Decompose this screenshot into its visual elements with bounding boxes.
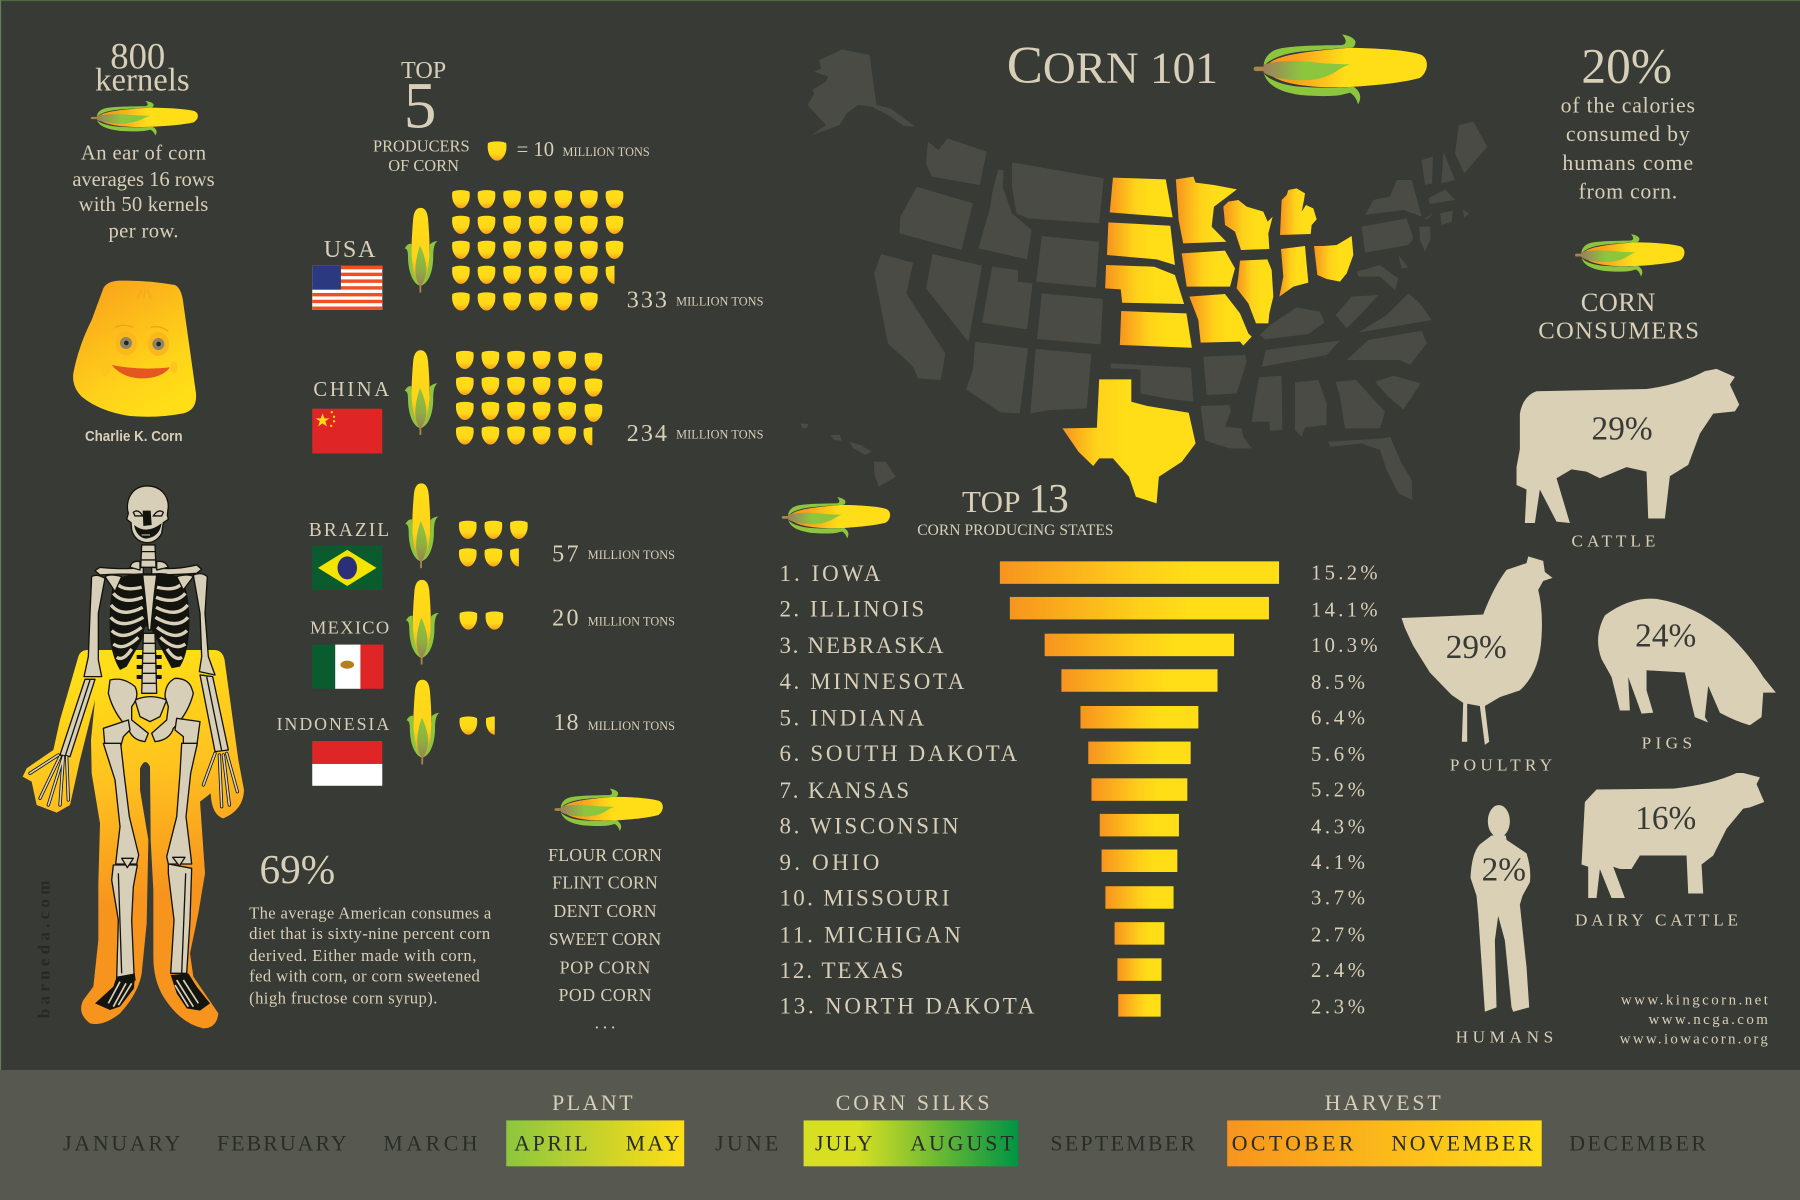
- months: APRIL: [514, 1131, 588, 1155]
- gray eastern states: [1201, 180, 1469, 500]
- icon: upright corn: [405, 350, 438, 435]
- percentages: 4.3%: [1311, 816, 1365, 838]
- calendar highlight: corn silks: [804, 1120, 1018, 1166]
- flag: China: [312, 409, 382, 453]
- row: Mexico: 20: [552, 606, 579, 632]
- heading: corn consumers: CONSUMERS: [1538, 318, 1699, 345]
- text block: corn types list: FLINT CORN: [552, 873, 658, 893]
- icon: upright corn: [405, 208, 438, 293]
- text block: American diet: (high fructose corn syrup).: [249, 988, 437, 1007]
- calendar stage labels: PLANT: [552, 1091, 633, 1115]
- callout: 20 percent of calories: 20%: [1581, 39, 1672, 94]
- percent labels: [1446, 411, 1696, 888]
- text block: corn types list: POP CORN: [560, 957, 650, 977]
- bars: [1000, 561, 1279, 1017]
- Texas highlighted: [1062, 379, 1196, 503]
- row: Brazil: MILLION TONS: [588, 548, 675, 562]
- text block: calories: humans come: [1562, 151, 1693, 175]
- row: USA: USA: [324, 237, 376, 263]
- text block: American diet: The average American consumes a: [249, 903, 492, 922]
- upper skeleton: [60, 486, 228, 757]
- heading: 800: 800: [110, 35, 165, 76]
- text block: calories: [1561, 94, 1695, 204]
- text block: kernels description: An ear of corn: [81, 143, 207, 165]
- percentages: 5.2%: [1311, 780, 1365, 802]
- row: USA: 333: [627, 288, 667, 314]
- row: Mexico: MEXICO: [310, 618, 389, 638]
- months: NOVEMBER: [1391, 1131, 1533, 1155]
- state names: 11. MICHIGAN: [779, 922, 961, 947]
- eastern corn belt states highlighted: [1182, 188, 1353, 346]
- state names: 4. MINNESOTA: [779, 669, 965, 694]
- months: MAY: [626, 1131, 680, 1155]
- western corn belt states highlighted: [1105, 177, 1237, 348]
- heading: kernels: kernels: [95, 63, 190, 99]
- animal labels: HUMANS: [1456, 1027, 1553, 1046]
- text block: corn types list: DENT CORN: [553, 901, 657, 921]
- heading: top 13: 13: [1029, 475, 1069, 521]
- panel: top 13 states: [779, 475, 1378, 1019]
- icon: corn: [91, 101, 198, 135]
- text block: corn types list: ...: [595, 1013, 615, 1033]
- row: Indonesia: [277, 680, 675, 786]
- months: OCTOBER: [1232, 1131, 1354, 1155]
- gray western states: [801, 49, 1487, 487]
- kernels: 33.3: [452, 190, 623, 311]
- icon: poultry: [1402, 556, 1553, 745]
- icon: corn: [782, 497, 890, 538]
- animal labels: DAIRY CATTLE: [1575, 910, 1738, 929]
- text block: American diet: fed with corn, or corn sweetened: [249, 967, 481, 986]
- percentages: 6.4%: [1311, 707, 1365, 729]
- months: SEPTEMBER: [1050, 1131, 1195, 1155]
- percentages: 15.2%: [1311, 563, 1378, 585]
- text block: kernels description: averages 16 rows: [72, 169, 215, 191]
- months: DECEMBER: [1569, 1131, 1706, 1155]
- panel: skeleton body illustration: [23, 486, 244, 1028]
- row: USA: [312, 190, 764, 314]
- icon: upright corn: [406, 680, 440, 765]
- legend: kernel equals ten million tons: MILLION TONS: [562, 145, 650, 159]
- heading: top 5 producers of corn: [373, 58, 470, 175]
- text block: American diet: derived. Either made with corn,: [249, 946, 476, 965]
- percent labels: 24%: [1635, 617, 1696, 654]
- text block: corn types list: SWEET CORN: [549, 929, 661, 949]
- kernels: 23.4: [456, 351, 602, 445]
- text block: kernels description: with 50 kernels: [79, 194, 208, 216]
- legend: kernel equals ten million tons: = 10: [517, 139, 554, 161]
- months: AUGUST: [910, 1131, 1014, 1155]
- source urls: www.ncga.com: [1648, 1012, 1768, 1028]
- row: China: CHINA: [313, 379, 389, 401]
- icon: cattle: [1517, 369, 1739, 523]
- percentages: 2.4%: [1311, 960, 1365, 982]
- kernels: 1.8: [460, 717, 495, 735]
- icon: title corn: [1254, 34, 1427, 104]
- animal labels: [1450, 531, 1738, 1046]
- source urls: [1620, 992, 1769, 1047]
- row: China: 234: [627, 421, 667, 447]
- heading: top 5 producers of corn: PRODUCERS: [373, 137, 470, 156]
- state names: 13. NORTH DAKOTA: [779, 994, 1035, 1019]
- row: Mexico: MILLION TONS: [588, 615, 675, 629]
- panel: 800 kernels: [72, 35, 215, 243]
- row: Indonesia: 18: [553, 710, 579, 736]
- icon: corn: [1575, 234, 1684, 277]
- skull: [127, 486, 168, 543]
- icon: upright corn: [406, 580, 439, 665]
- months: [63, 1131, 1706, 1155]
- text block: American diet: [249, 903, 492, 1007]
- title: CORN 101: [1007, 37, 1218, 95]
- state names: 12. TEXAS: [779, 958, 903, 983]
- heading: corn consumers: [1538, 287, 1699, 345]
- months: JULY: [815, 1131, 873, 1155]
- row: Mexico: [310, 580, 675, 689]
- percentages: 3.7%: [1311, 888, 1365, 910]
- percent labels: 29%: [1446, 629, 1507, 666]
- icon: corn: [554, 789, 663, 831]
- percentages: 8.5%: [1311, 672, 1365, 694]
- icon: Charlie K. Corn mascot: [73, 281, 196, 417]
- heading: top 13: [917, 475, 1114, 539]
- panel: corn types: [548, 789, 663, 1033]
- text block: calories: of the calories: [1561, 94, 1695, 118]
- calendar stage labels: [552, 1091, 1441, 1115]
- row: USA: MILLION TONS: [676, 294, 764, 308]
- map of the United States: [801, 49, 1487, 503]
- state names: 10. MISSOURI: [779, 886, 949, 911]
- percentages: 4.1%: [1311, 852, 1365, 874]
- silhouettes: [1402, 369, 1776, 1012]
- panel: corn calendar: [0, 1070, 1800, 1200]
- kernels: 2: [460, 611, 503, 630]
- percent labels: 29%: [1592, 411, 1653, 448]
- animal labels: POULTRY: [1450, 755, 1552, 774]
- panel: top 5 producers: [277, 58, 764, 786]
- text block: kernels description: per row.: [108, 221, 179, 243]
- text block: calories: consumed by: [1566, 122, 1690, 146]
- state names: 3. NEBRASKA: [779, 633, 944, 658]
- row: Indonesia: INDONESIA: [277, 714, 389, 734]
- state names: 9. OHIO: [779, 850, 879, 875]
- heading: top 5 producers of corn: 5: [404, 70, 437, 142]
- calendar stage labels: HARVEST: [1325, 1091, 1441, 1115]
- heading: top 13: CORN PRODUCING STATES: [917, 522, 1114, 539]
- animal labels: CATTLE: [1572, 531, 1655, 550]
- heading: top 5 producers of corn: OF CORN: [388, 156, 459, 175]
- text block: corn types list: POD CORN: [558, 985, 652, 1005]
- caption: Charlie K. Corn: Charlie K. Corn: [85, 429, 183, 445]
- state names: 5. INDIANA: [779, 706, 925, 731]
- flag: Indonesia: [312, 741, 382, 786]
- calendar highlight: plant: [506, 1120, 684, 1166]
- credit: barneda.com: barneda.com: [34, 880, 53, 1018]
- text block: American diet: diet that is sixty-nine percent corn: [249, 924, 491, 943]
- icon: human: [1471, 805, 1530, 1012]
- state names: 7. KANSAS: [779, 778, 909, 803]
- row: Indonesia: MILLION TONS: [588, 719, 675, 733]
- row: Brazil: [309, 483, 675, 590]
- percentages: 10.3%: [1311, 635, 1378, 657]
- row: China: [312, 350, 764, 453]
- icon: pig: [1598, 599, 1776, 725]
- icon: upright corn: [405, 483, 439, 568]
- months: FEBRUARY: [217, 1131, 347, 1155]
- heading: top 5 producers of corn: TOP: [401, 58, 446, 84]
- calendar stage labels: CORN SILKS: [836, 1091, 990, 1115]
- percentages: 2.3%: [1311, 997, 1365, 1019]
- flag: Mexico: [312, 645, 383, 689]
- callout: 69 percent: [249, 846, 492, 1007]
- source urls: www.kingcorn.net: [1621, 992, 1769, 1008]
- hands: [30, 753, 237, 807]
- percentages: 14.1%: [1311, 599, 1378, 621]
- percentages: [1311, 563, 1378, 1019]
- state names: 1. IOWA: [779, 561, 881, 586]
- text block: corn types list: FLOUR CORN: [548, 845, 662, 865]
- percentages: 5.6%: [1311, 744, 1365, 766]
- skeleton: [30, 486, 237, 1011]
- row: China: MILLION TONS: [676, 428, 764, 442]
- animal labels: PIGS: [1642, 733, 1692, 752]
- legend: kernel equals ten million tons: [488, 139, 650, 161]
- source urls: www.iowacorn.org: [1620, 1031, 1768, 1047]
- icon: dairy cattle: [1582, 773, 1764, 898]
- kernels: 5.7: [459, 521, 528, 567]
- text block: corn types list: [548, 845, 662, 1033]
- heading: corn consumers: CORN: [1581, 287, 1655, 317]
- months: JUNE: [715, 1131, 778, 1155]
- text block: calories: from corn.: [1578, 180, 1677, 204]
- row: Brazil: BRAZIL: [309, 520, 389, 541]
- months: MARCH: [383, 1131, 478, 1155]
- body silhouette in corn colours: [23, 650, 244, 1028]
- state names: 2. ILLINOIS: [779, 596, 924, 621]
- panel: corn consumers: [1402, 234, 1776, 1047]
- state names: 8. WISCONSIN: [779, 813, 959, 838]
- callout: 20 percent of calories: [1561, 39, 1695, 204]
- row: Brazil: 57: [552, 541, 579, 567]
- calendar highlight: harvest: [1227, 1120, 1542, 1166]
- bar chart: state share: [779, 561, 1378, 1019]
- state names: [779, 561, 1035, 1019]
- percent labels: 16%: [1635, 800, 1696, 837]
- months: JANUARY: [63, 1131, 180, 1155]
- flag: USA: [312, 266, 382, 310]
- flag: Brazil: [312, 546, 382, 590]
- percentages: 2.7%: [1311, 924, 1365, 946]
- statistic: 69%: 69%: [259, 846, 335, 892]
- percent labels: 2%: [1482, 851, 1526, 888]
- text block: kernels description: [72, 143, 215, 243]
- lower skeleton: [103, 743, 139, 864]
- heading: top 13: TOP: [962, 484, 1021, 519]
- state names: 6. SOUTH DAKOTA: [779, 741, 1018, 766]
